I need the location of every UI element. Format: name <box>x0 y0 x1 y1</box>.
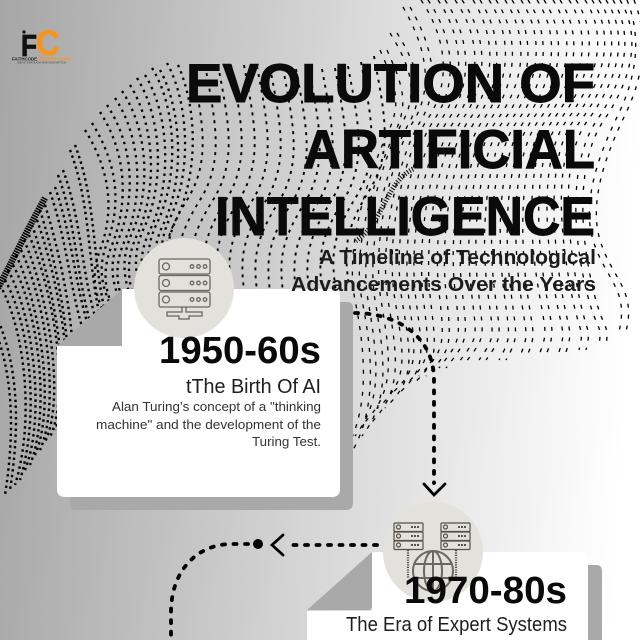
logo: F <box>21 28 37 63</box>
logo: FAITHCODE <box>12 56 37 62</box>
title: INTELLIGENCE <box>215 185 595 247</box>
icon: networked servers and globe <box>383 502 483 602</box>
logo: C <box>36 24 60 63</box>
card 1970-80s <box>307 552 602 640</box>
logo <box>12 24 71 64</box>
text: 1950-60s: tThe Birth Of AI <box>186 376 321 398</box>
text: 1970-80s: The Era of Expert Systems <box>346 614 567 636</box>
dashed arrow from 1970-80s onward <box>171 535 377 640</box>
text: 1970-80s: 1970-80s <box>404 570 567 612</box>
text: 1950-60s: 1950-60s <box>159 330 321 372</box>
icon: server rack <box>134 238 234 338</box>
title: ARTIFICIAL <box>303 118 595 180</box>
card 2 folded corner <box>307 552 372 610</box>
text: 1950-60s: machine" and the development of the <box>96 417 321 432</box>
dense ridge of the wave <box>0 198 45 288</box>
dotted wave background pattern <box>0 0 640 495</box>
text: 1970-80s <box>346 570 567 636</box>
subtitle: Advancements Over the Years <box>291 274 596 296</box>
card 1 folded corner <box>57 289 122 346</box>
subtitle <box>291 247 596 296</box>
card 1950-60s <box>57 289 353 510</box>
title: EVOLUTION OF <box>186 52 595 114</box>
logo: IDEAS THROUGH AND INNOVATION <box>17 60 66 64</box>
dense fold of the wave <box>356 169 413 241</box>
card 1 drop shadow <box>70 302 353 510</box>
text: 1950-60s: Turing Test. <box>252 434 321 449</box>
subtitle: A Timeline of Technological <box>319 247 596 269</box>
title <box>186 52 595 247</box>
dashed arrow 1950-60s to 1970-80s <box>355 313 445 495</box>
card 1 white panel <box>57 289 340 497</box>
text: 1950-60s <box>96 330 321 449</box>
logo: TECHNOLOGIES <box>38 56 71 62</box>
text: 1950-60s: Alan Turing’s concept of a "thinking <box>112 399 321 414</box>
card 2 white panel <box>307 552 588 640</box>
card 2 drop shadow <box>580 565 602 640</box>
